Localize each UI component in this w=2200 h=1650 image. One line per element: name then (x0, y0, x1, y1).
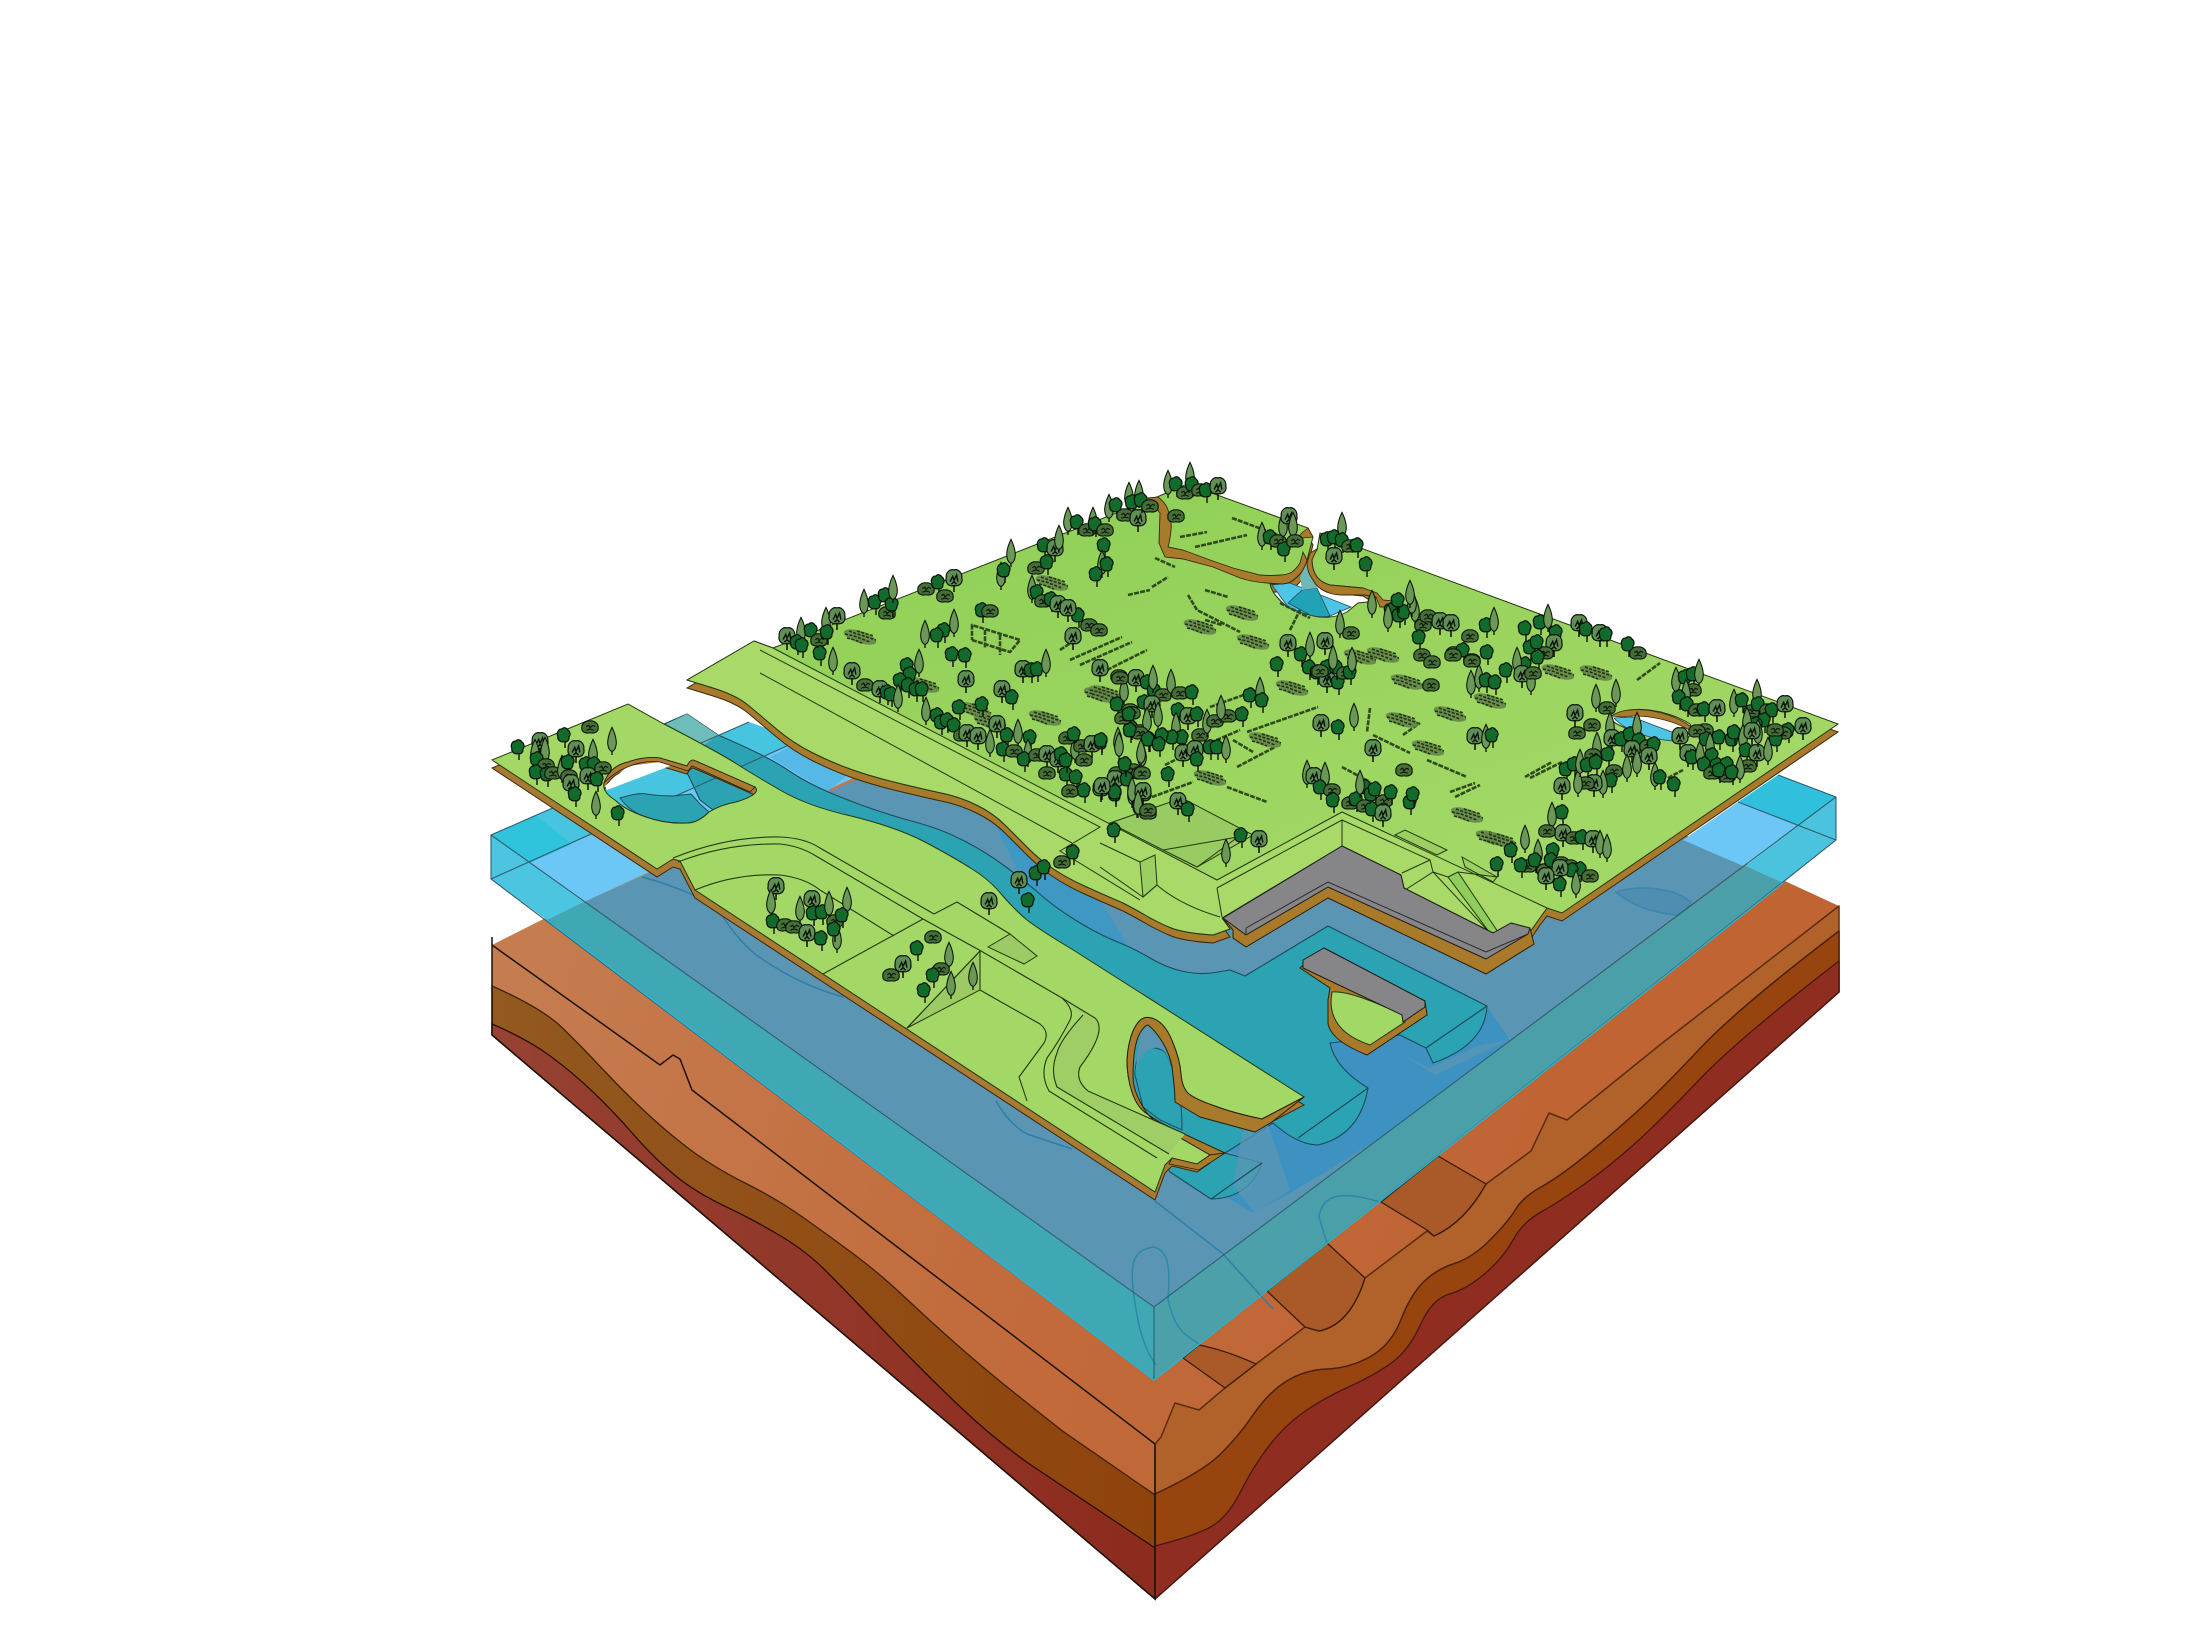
gap water pale (1300, 560, 1317, 590)
light blue water left (530, 740, 860, 902)
strip tip brown (1169, 1153, 1225, 1170)
pond water (1614, 717, 1685, 741)
strip top (492, 704, 1304, 1192)
right face layer 2 (1155, 931, 1839, 1599)
left face layer 3 (492, 1024, 1155, 1599)
trees on embankment and channel (981, 845, 1079, 915)
embankment darker field (1110, 798, 1253, 867)
strip s-channel dark (1054, 998, 1185, 1154)
trees on left strip (511, 721, 977, 1003)
scrub patches (842, 572, 1614, 851)
pale channel end (666, 714, 718, 745)
lens edges (1211, 1006, 1487, 1199)
light blue water right (1683, 802, 1798, 866)
hedges and scrub lines (972, 518, 1683, 802)
stream top fragment (1295, 528, 1313, 540)
loop bay blue (1135, 1025, 1172, 1075)
right side over white (1745, 797, 1836, 883)
embankment (687, 641, 1547, 935)
blue wedge by bank (990, 815, 1135, 957)
left land strip (492, 704, 1304, 1200)
left face layer 1 (492, 945, 1155, 1599)
slab surface dips (1183, 1156, 1486, 1388)
hole water (620, 794, 709, 823)
road brown (1223, 882, 1534, 974)
road kerb (1246, 882, 1528, 952)
lower rock block (492, 600, 1839, 1599)
slab edge lines (492, 937, 1155, 1599)
water box edges (491, 722, 1836, 1380)
teal channel (664, 714, 1487, 1199)
gap water (1272, 583, 1351, 617)
embankment side panels (1140, 830, 1497, 897)
main land plate (687, 484, 1838, 974)
water front line (547, 883, 1783, 1380)
pond hole right (1609, 709, 1692, 742)
left face layer 2 (492, 986, 1155, 1599)
bank light wedge (770, 745, 850, 792)
pier land (1331, 992, 1405, 1045)
grey patches in channel (1233, 1040, 1510, 1213)
deeper water corner left (491, 815, 573, 863)
embankment lines (760, 650, 1497, 933)
water over rock (584, 700, 1743, 1307)
trees on main land (779, 462, 1811, 898)
pond rim (1612, 710, 1691, 731)
loop brown rim (1127, 1017, 1304, 1155)
main thickness (687, 492, 1838, 943)
pier grey road (1303, 948, 1425, 1022)
left side over rock (547, 902, 1154, 1380)
gap water teal (1288, 588, 1330, 617)
hole brown rim (604, 758, 755, 792)
deep water right corner (1738, 775, 1836, 825)
river outlines (642, 877, 1380, 1365)
strip field dark (907, 934, 1037, 1028)
grey road (1223, 846, 1530, 959)
water layer (491, 700, 1836, 1380)
brown stream channel (1148, 497, 1307, 584)
left side over white (491, 835, 584, 920)
pond white (1609, 709, 1692, 742)
pier island (1300, 948, 1427, 1055)
strip contour lines (673, 837, 1185, 1158)
main top (687, 484, 1838, 935)
hole white gap (605, 762, 698, 790)
right face layer 3 (1155, 961, 1839, 1599)
stream right bank (1307, 549, 1402, 607)
river pool right (1616, 888, 1691, 915)
ramp strip (1448, 872, 1498, 933)
water over white, back (491, 722, 800, 863)
slab top surface (492, 600, 1839, 1444)
blue deep channel (1183, 970, 1510, 1213)
right strip over rock (1154, 866, 1783, 1380)
right face layer 1 (1155, 906, 1839, 1599)
loop bay water (1135, 1048, 1182, 1130)
pier brown (1300, 948, 1427, 1055)
strip thickness (492, 712, 1304, 1200)
